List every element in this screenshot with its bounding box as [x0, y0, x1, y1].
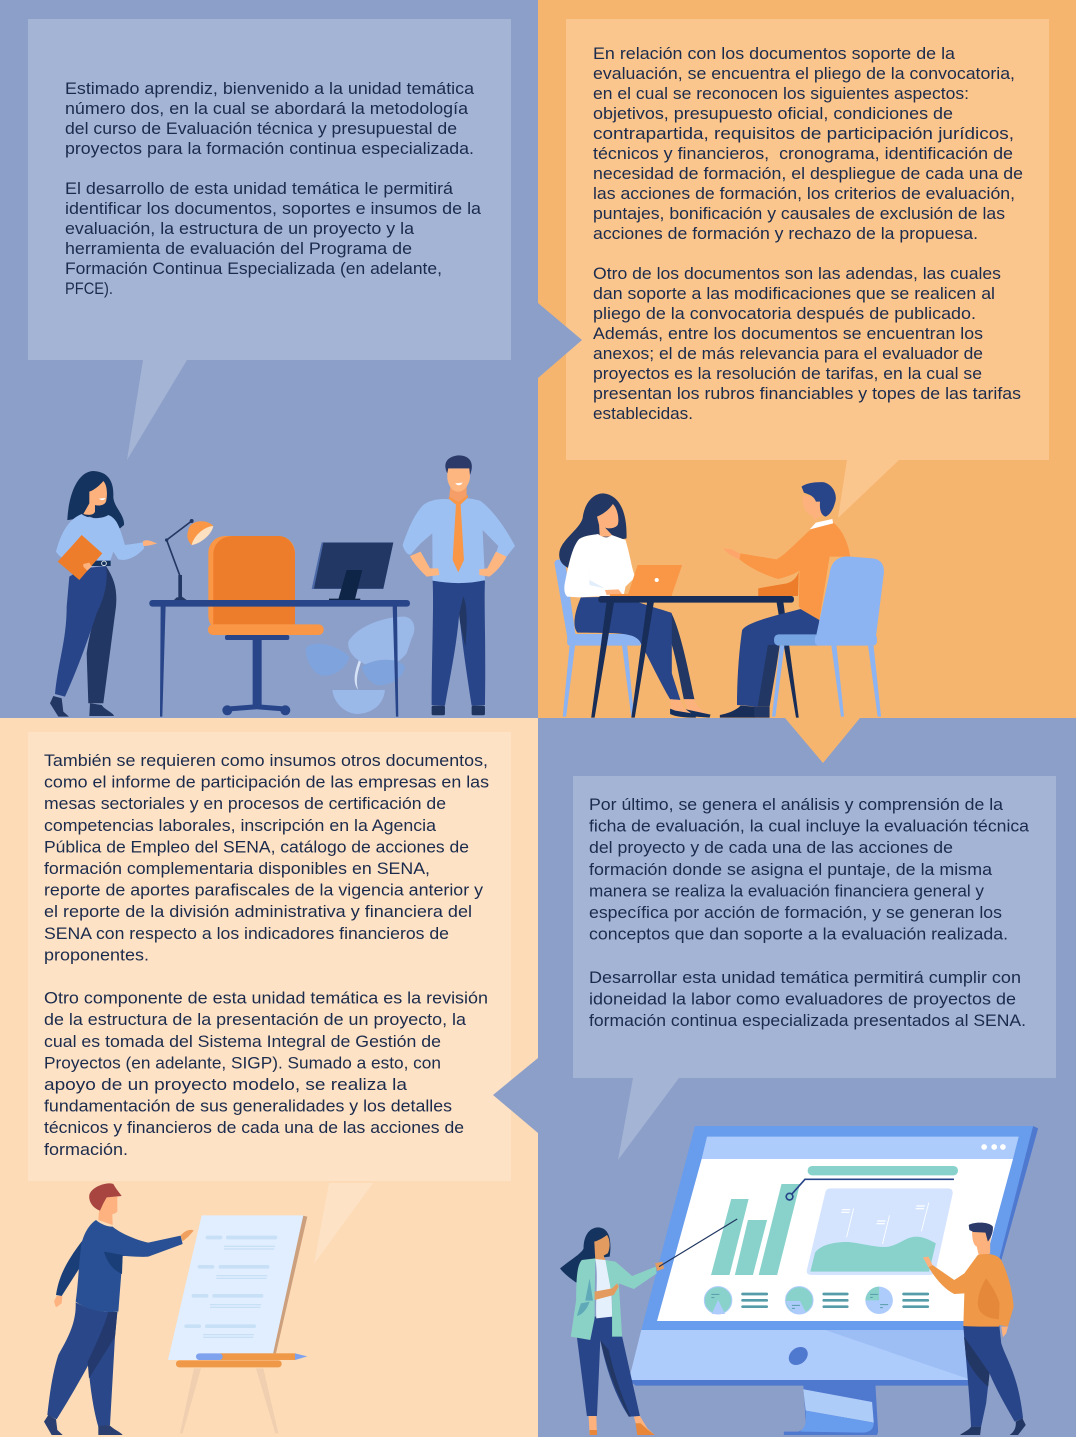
icon: plant [306, 617, 414, 714]
panel: documents speech bubble [566, 19, 1049, 518]
panel: other inputs speech bubble [28, 732, 511, 1264]
text block: welcome: número dos, en la cual se abordará la metodología [65, 99, 469, 118]
text block: other inputs: formación. [44, 1140, 128, 1159]
text block: documents: evaluación, se encuentra el pliego de la convocatoria, [593, 64, 1015, 83]
figure: man pointing at paper [44, 1183, 194, 1435]
text block: documents: necesidad de formación, el despliegue de cada una de [593, 164, 1023, 183]
icon: laptop [610, 565, 682, 597]
text block: documents: proyectos es la resolución de tarifas, en la cual se [593, 364, 982, 383]
pie charts with legends [704, 1287, 928, 1314]
text block: other inputs [44, 751, 489, 1159]
text block: other inputs: Proyectos (en adelante, SIGP). Sumado a esto, con [44, 1053, 441, 1072]
text block: other inputs: técnicos y financieros de cada una de las acciones de [44, 1118, 464, 1137]
text block: other inputs: fundamentación de sus generalidades y los detalles [44, 1097, 452, 1116]
text block: closing: manera se realiza la evaluación financiera general y [589, 881, 985, 900]
text block: welcome: PFCE). [65, 279, 113, 298]
text block: documents [593, 44, 1023, 423]
panel: closing speech bubble [573, 776, 1056, 1160]
illustration: two people presenting a dashboard [560, 1126, 1038, 1435]
text block: documents: objetivos, presupuesto oficial, condiciones de [593, 104, 953, 123]
text block: welcome: El desarrollo de esta unidad temática le permitirá [65, 179, 454, 198]
text block: closing: formación continua especializada presentados al SENA. [589, 1011, 1026, 1030]
figure: woman with folder [50, 471, 157, 717]
text block: documents: contrapartida, requisitos de participación jurídicos, [593, 124, 1014, 143]
text block: closing: Desarrollar esta unidad temática permitirá cumplir con [589, 968, 1021, 987]
text block: other inputs: apoyo de un proyecto modelo, se realiza la [44, 1075, 408, 1094]
icon: lamp [165, 519, 213, 600]
icon: chair [208, 536, 324, 715]
text block: other inputs: También se requieren como insumos otros documentos, [44, 751, 488, 770]
text block: other inputs: cual es tomada del Sistema Integral de Gestión de [44, 1032, 441, 1051]
text block: welcome: proyectos para la formación continua especializada. [65, 139, 474, 158]
arrow: from fourth panel to third panel [493, 1058, 538, 1133]
icon: left chair [554, 560, 641, 717]
chart title and leader line [786, 1166, 958, 1200]
text block: closing: Por último, se genera el análisis y comprensión de la [589, 795, 1004, 814]
text block: welcome: Formación Continua Especializada (en adelante, [65, 259, 442, 278]
text block: other inputs: SENA con respecto a los indicadores financieros de [44, 924, 449, 943]
text block: welcome: del curso de Evaluación técnica y presupuestal de [65, 119, 457, 138]
illustration: office scene with desk [50, 455, 515, 717]
icon: desk [149, 600, 410, 717]
text block: documents: anexos; el de más relevancia para el evaluador de [593, 344, 983, 363]
icon: right chair [772, 557, 884, 717]
figure: woman with pointer [560, 1219, 737, 1435]
figure: man with tie [403, 455, 515, 715]
text block: other inputs: Pública de Empleo del SENA, catálogo de acciones de [44, 837, 469, 856]
text block: closing: formación donde se asigna el puntaje, de la misma [589, 860, 993, 879]
icon: easel with paper [168, 1215, 307, 1433]
text block: other inputs: Otro componente de esta unidad temática es la revisión [44, 989, 488, 1008]
text block: closing [589, 795, 1030, 1030]
text block: other inputs: competencias laborales, inscripción en la Agencia [44, 816, 437, 835]
text block: documents: pliego de la convocatoria después de publicado. [593, 304, 976, 323]
arrow: from first panel to second panel [538, 303, 582, 378]
text block: documents: dan soporte a las modificaciones que se realicen al [593, 284, 995, 303]
illustration: man presenting at an easel [44, 1183, 307, 1435]
bar chart [711, 1184, 800, 1275]
text block: welcome: identificar los documentos, soportes e insumos de la [65, 199, 482, 218]
text block: welcome: Estimado aprendiz, bienvenido a la unidad temática [65, 79, 475, 98]
illustration: two people at a table [554, 482, 884, 718]
text block: documents: Otro de los documentos son las adendas, las cuales [593, 264, 1001, 283]
text block: other inputs: proponentes. [44, 945, 149, 964]
text block: documents: establecidas. [593, 404, 693, 423]
text block: other inputs: de la estructura de la presentación de un proyecto, la [44, 1010, 467, 1029]
figure: man in orange sweater [720, 482, 850, 718]
text block: documents: Además, entre los documentos se encuentran los [593, 324, 983, 343]
figure: woman with laptop [559, 493, 711, 718]
text block: welcome: evaluación, la estructura de un proyecto y la [65, 219, 415, 238]
text block: closing: ficha de evaluación, la cual incluye la evaluación técnica [589, 817, 1030, 836]
icon: monitor [312, 542, 393, 600]
text block: documents: puntajes, bonificación y causales de exclusión de las [593, 204, 1005, 223]
text block: documents: acciones de formación y rechazo de la propuesa. [593, 224, 978, 243]
text block: other inputs: el reporte de la división administrativa y financiera del [44, 902, 472, 921]
text block: welcome: herramienta de evaluación del Programa de [65, 239, 412, 258]
icon: monitor with charts [629, 1126, 1038, 1435]
text block: documents: presentan los rubros financiables y topes de las tarifas [593, 384, 1021, 403]
text block: other inputs: reporte de aportes parafiscales de la vigencia anterior y [44, 881, 484, 900]
text block: documents: técnicos y financieros, cronograma, identificación de [593, 144, 1013, 163]
figure: man in orange sweater [923, 1223, 1026, 1435]
text block: closing: del proyecto y de cada una de las acciones de [589, 838, 953, 857]
text block: closing: conceptos que dan soporte a la evaluación realizada. [589, 925, 1008, 944]
text block: documents: las acciones de formación, los criterios de evaluación, [593, 184, 1015, 203]
text block: other inputs: mesas sectoriales y en procesos de certificación de [44, 794, 446, 813]
arrow: from second panel to fourth panel [785, 718, 860, 763]
text lines on paper [184, 1236, 277, 1338]
text block: other inputs: formación complementaria disponibles en SENA, [44, 859, 430, 878]
text block: documents: en el cual se reconocen los siguientes aspectos: [593, 84, 969, 103]
icon: table [591, 596, 799, 718]
text block: closing: idoneidad la labor como evaluadores de proyectos de [589, 990, 1016, 1009]
text block: documents: En relación con los documentos soporte de la [593, 44, 956, 63]
text block: welcome [65, 79, 482, 298]
panel: welcome speech bubble [28, 19, 511, 460]
text block: other inputs: como el informe de participación de las empresas en las [44, 773, 489, 792]
area chart [807, 1188, 953, 1275]
text block: closing: específica por acción de formación, y se generan los [589, 903, 1002, 922]
